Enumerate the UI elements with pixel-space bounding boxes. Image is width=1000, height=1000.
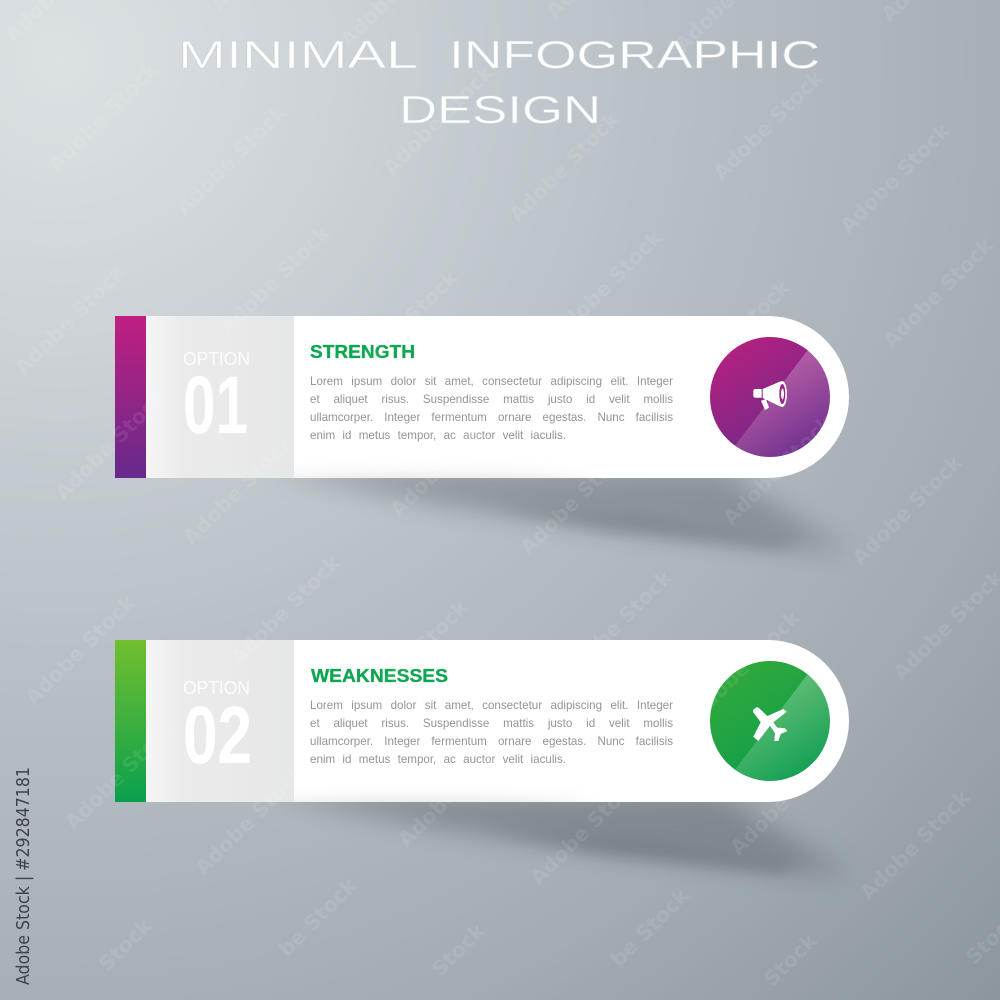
watermark pattern: Stock <box>427 918 490 981</box>
icon: purple circle with megaphone <box>710 337 831 458</box>
shadow: card 2 <box>270 794 850 876</box>
option label: OPTION <box>183 678 250 698</box>
watermark pattern: Adobe Stock <box>190 759 311 880</box>
white panel bottom fade <box>294 795 568 802</box>
watermark pattern: Adobe Stock <box>393 731 514 852</box>
icon: green circle with plane <box>710 661 831 782</box>
watermark pattern: Adobe Stock <box>718 409 839 530</box>
watermark pattern: Adobe Stock <box>10 259 131 380</box>
body text: enim id metus tempor, ac auctor velit iaculis. <box>310 753 566 766</box>
number 02: 02 <box>183 690 252 781</box>
watermark pattern: Stock <box>759 928 822 991</box>
body text: Lorem ipsum dolor sit amet, consectetur adipiscing elit. Integer <box>310 699 673 712</box>
watermark pattern: Adobe Stock <box>557 564 678 685</box>
watermark pattern: Adobe Stock <box>685 604 806 725</box>
colour bar <box>115 316 146 478</box>
body text <box>310 373 674 447</box>
watermark pattern: Stock <box>94 913 157 976</box>
watermark pattern: Adobe Stock <box>675 274 796 395</box>
watermark pattern: Adobe Stock <box>353 594 474 715</box>
watermark pattern: Adobe Stock <box>878 232 999 353</box>
watermark pattern: Adobe Stock <box>525 769 646 890</box>
title: MINIMAL <box>178 34 418 77</box>
watermark pattern: Adobe Stock <box>725 739 846 860</box>
watermark pattern: Adobe Stock <box>343 264 464 385</box>
watermark pattern: Adobe Stock <box>378 59 499 180</box>
number 01: 01 <box>183 360 248 451</box>
watermark pattern: Adobe Stock <box>215 219 336 340</box>
watermark pattern: be Stock <box>606 883 694 971</box>
watermark pattern: Adobe Stock <box>855 784 976 905</box>
heading: STRENGTH <box>310 342 415 362</box>
watermark pattern: Adobe Stock <box>178 429 299 550</box>
body text: Lorem ipsum dolor sit amet, consectetur adipiscing elit. Integer <box>310 375 673 388</box>
watermark pattern: Adobe Stock <box>515 439 636 560</box>
watermark pattern: Adobe Stock <box>171 99 292 220</box>
watermark pattern: Adobe Stock <box>43 56 164 177</box>
option panel <box>146 640 294 802</box>
option label: OPTION <box>183 349 250 369</box>
title <box>178 34 820 132</box>
title: DESIGN <box>399 89 601 132</box>
body text: ullamcorper. Integer fermentum ornare egestas. Nunc facilisis <box>310 735 673 748</box>
body text: et aliquet risus. Suspendisse mattis justo id velit mollis <box>310 393 673 406</box>
watermark pattern: be Stock <box>274 873 362 961</box>
heading: WEAKNESSES <box>311 666 448 686</box>
watermark pattern: Adobe Stock <box>60 714 181 835</box>
body text: ullamcorper. Integer fermentum ornare egestas. Nunc facilisis <box>310 411 673 424</box>
card body <box>115 640 849 802</box>
body text: enim id metus tempor, ac auctor velit iaculis. <box>310 429 566 442</box>
watermark pattern: Adobe Stock <box>504 106 625 227</box>
stock id label: Adobe Stock | #292847181 <box>13 767 34 985</box>
watermark pattern: Adobe Stock <box>50 384 171 505</box>
shadow: card 1 <box>270 470 850 552</box>
title: INFOGRAPHIC <box>449 34 820 77</box>
option panel <box>146 316 294 478</box>
watermark pattern: Adobe Stock <box>225 549 346 670</box>
panel: weaknesses card <box>115 640 849 820</box>
body text: et aliquet risus. Suspendisse mattis justo id velit mollis <box>310 717 673 730</box>
body text <box>310 697 674 771</box>
panel: strength card <box>115 316 849 496</box>
watermark pattern: Adobe Stock <box>20 589 141 710</box>
watermark pattern: Adobe Stock <box>547 224 668 345</box>
watermark pattern: Adobe Stock <box>847 449 968 570</box>
watermark pattern: Adobe Stock <box>708 64 829 185</box>
colour bar <box>115 640 146 802</box>
watermark pattern: Adobe Stock <box>385 401 506 522</box>
white panel bottom fade <box>294 471 568 478</box>
watermark pattern: Adobe Stock <box>835 117 956 238</box>
card body <box>115 316 849 478</box>
